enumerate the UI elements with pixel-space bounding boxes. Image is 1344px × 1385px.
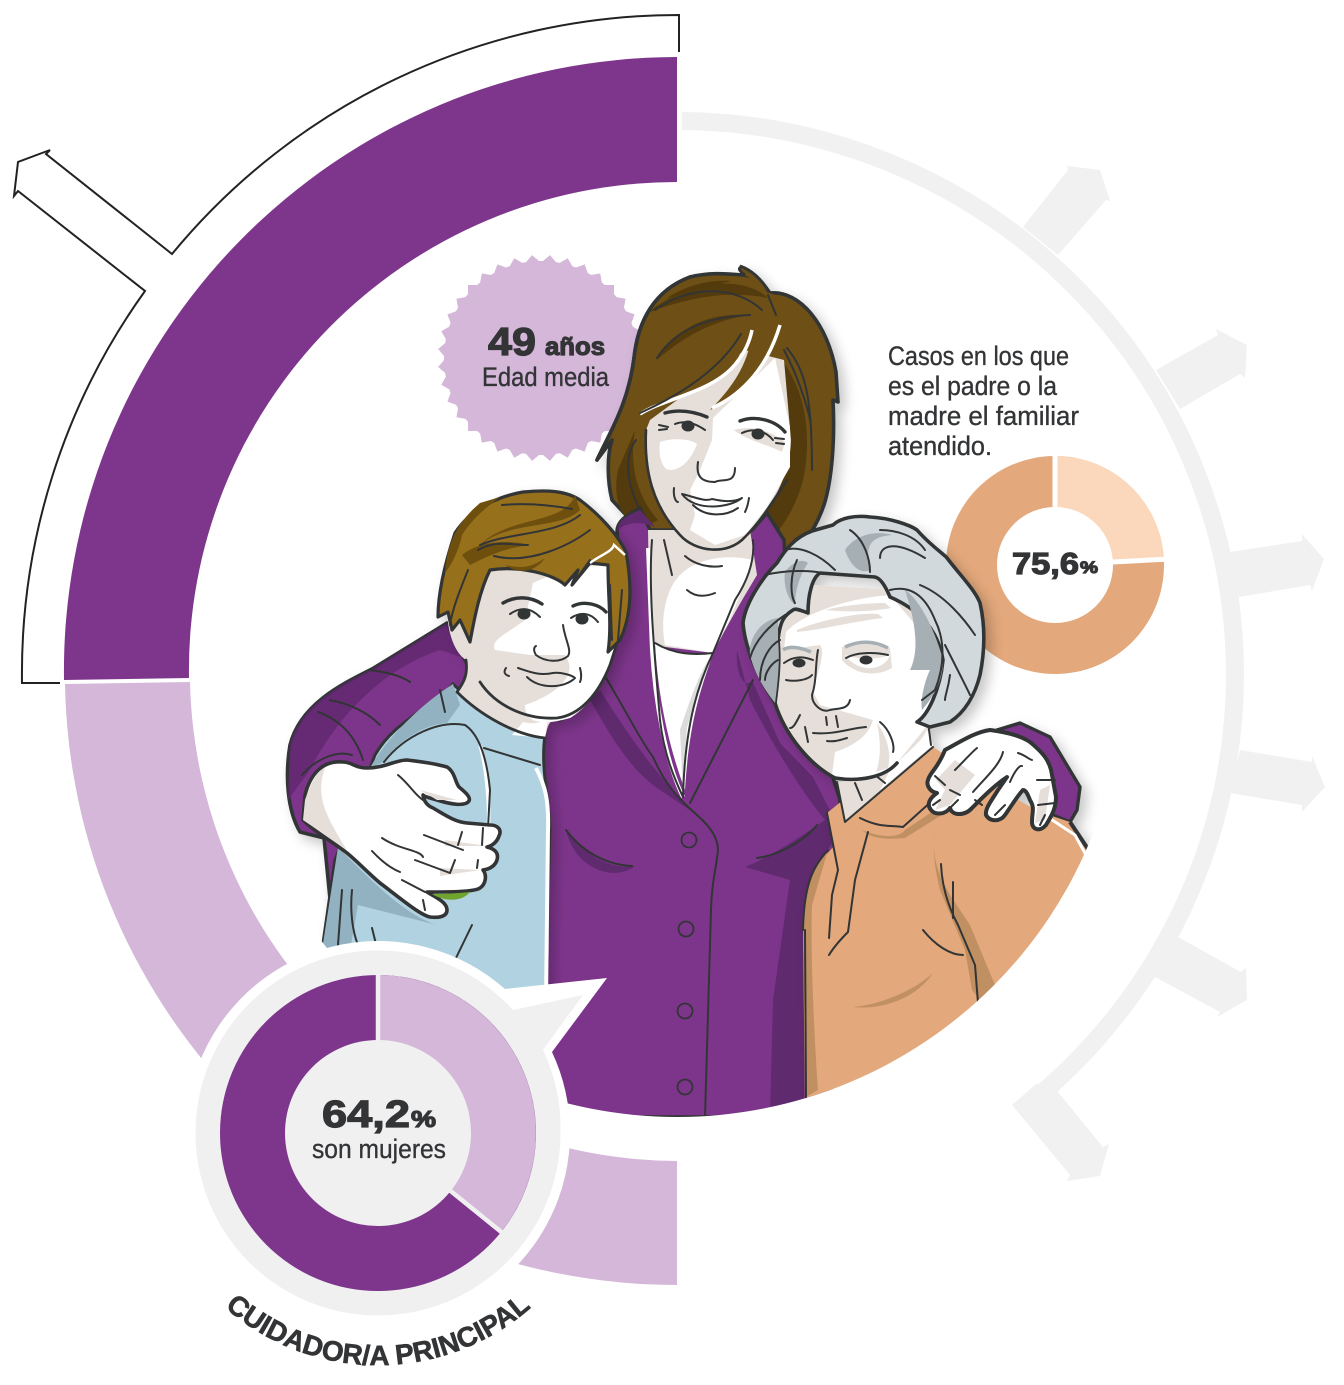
age caption: Edad media [482, 362, 610, 392]
boy hair [438, 491, 630, 652]
parent cases caption [888, 341, 1079, 461]
parent cases caption: Casos en los que [888, 341, 1069, 371]
text: CUIDADOR/A PRINCIPAL [228, 1296, 531, 1366]
boy shirt [322, 684, 550, 1020]
boy face [447, 560, 620, 738]
mother sleeve at shoulder [997, 723, 1080, 822]
mother figure [287, 266, 840, 1117]
age value: 49 [488, 321, 536, 364]
old woman figure [741, 514, 1093, 1098]
old woman face [775, 585, 937, 780]
parent cases caption: atendido. [888, 431, 992, 461]
gender donut [220, 970, 536, 1291]
old woman neck [837, 720, 933, 822]
orange donut: parent cases [946, 450, 1170, 674]
mother neck and top [648, 530, 757, 797]
mother face [646, 350, 791, 550]
age unit: años [545, 333, 605, 361]
illustration: family [287, 266, 1090, 1200]
donut percent: % [1080, 558, 1098, 577]
jacket seams [603, 673, 718, 1117]
parent cases caption: madre el familiar [888, 401, 1079, 431]
mother hand on boy [303, 760, 500, 917]
old woman shirt [802, 748, 1092, 1098]
light purple arc [65, 682, 677, 1285]
hand on old woman shoulder [927, 730, 1056, 829]
gender value: 64,2 [322, 1094, 410, 1136]
boy figure [322, 491, 630, 1020]
gender percent: % [411, 1106, 436, 1132]
outlined arc with arrow [14, 15, 679, 683]
curved label [177, 1249, 579, 1365]
mother hair [597, 266, 838, 550]
white halo with pointer [186, 941, 607, 1325]
old woman hair [743, 516, 984, 727]
mother jacket [287, 508, 840, 1117]
parent cases caption: es el padre o la [888, 371, 1058, 401]
mother front fringe [597, 277, 812, 510]
gray ring with arrows [682, 121, 1325, 1181]
gender caption: son mujeres [312, 1134, 446, 1164]
donut value: 75,6 [1012, 546, 1079, 581]
purple arc: caregivers outer band [64, 57, 677, 680]
starburst badge: average age [438, 255, 644, 461]
gender badge [186, 941, 607, 1325]
jacket buttons [678, 832, 696, 1094]
